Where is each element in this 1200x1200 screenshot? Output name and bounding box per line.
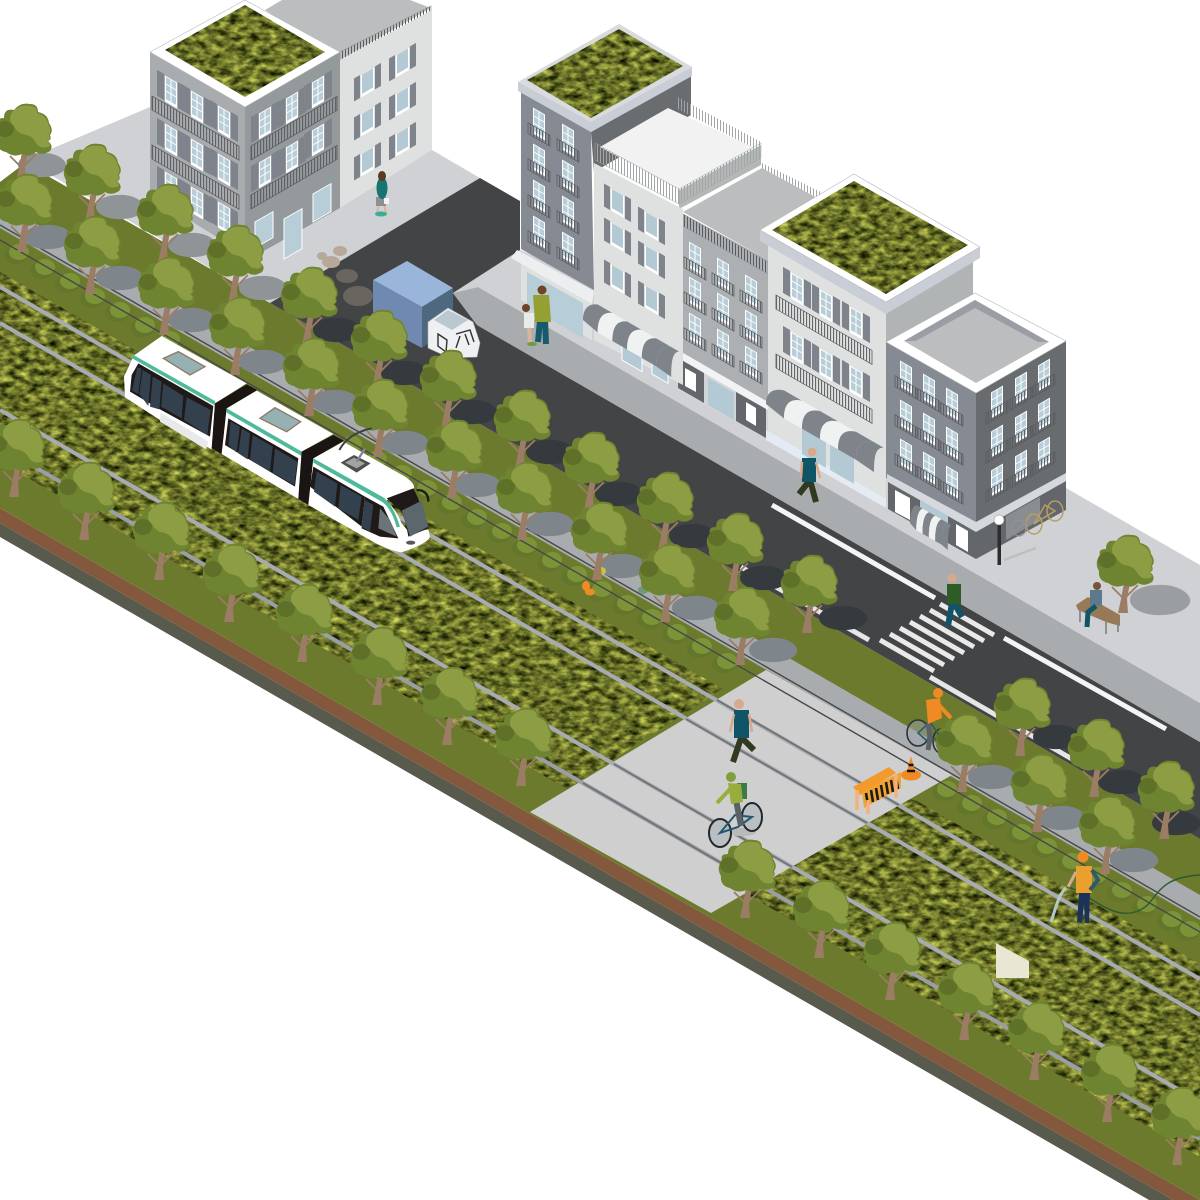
pedestrian on crossing slab	[730, 699, 754, 762]
darker sidewalk band	[453, 287, 1200, 742]
man torso	[533, 295, 551, 322]
orange cyclist	[907, 688, 951, 753]
mirror	[417, 490, 428, 502]
shoes	[375, 212, 387, 216]
building 2: light rear block	[265, 0, 432, 208]
car 1 skirt	[160, 413, 208, 449]
shop glass	[708, 378, 734, 420]
woman walking on plaza	[375, 171, 389, 216]
panel window left	[685, 368, 696, 392]
windows	[354, 43, 416, 181]
ground storey left	[888, 482, 976, 559]
globe	[994, 515, 1004, 525]
bag	[384, 198, 389, 204]
hair	[378, 171, 386, 181]
bicycle	[907, 720, 949, 753]
cone base	[901, 770, 921, 780]
left wall	[768, 240, 886, 505]
dark panel right	[736, 392, 766, 438]
pantograph base	[341, 455, 371, 473]
panel window right	[746, 402, 756, 426]
striped awning	[583, 296, 679, 381]
car 3 window band	[310, 467, 365, 527]
car 3 panes	[314, 472, 373, 532]
white roof top	[518, 24, 692, 122]
shirt	[734, 710, 749, 738]
overhead wires	[0, 225, 1200, 932]
right wall windows	[251, 70, 332, 193]
white roof frame	[886, 293, 1066, 393]
shirt	[947, 584, 961, 604]
car 2 skylight	[260, 408, 301, 432]
windscreen frame	[387, 488, 428, 537]
tree shadows: lane row	[24, 225, 1158, 872]
shadow	[728, 828, 756, 836]
roof terrace	[600, 108, 755, 190]
parked bicycles	[1012, 501, 1063, 536]
roof parapet	[518, 24, 692, 132]
shop glass	[622, 340, 668, 383]
torso	[1090, 590, 1102, 606]
water spray	[1051, 888, 1066, 922]
legs	[948, 603, 962, 626]
cone stripes	[907, 765, 915, 771]
car 3 front side pane	[378, 508, 397, 537]
inset roof	[904, 300, 1049, 383]
right windows	[986, 356, 1055, 502]
head	[1093, 582, 1101, 590]
car 2 side	[222, 408, 302, 499]
body	[926, 698, 942, 724]
upper lane line	[772, 505, 1166, 729]
worker watering	[1051, 852, 1098, 923]
side wall	[679, 145, 761, 209]
legs	[736, 800, 741, 826]
head	[734, 699, 744, 709]
left railing	[595, 143, 679, 204]
panel	[862, 772, 901, 808]
tree shadows on asphalt	[313, 318, 1200, 835]
car 3 teal band	[313, 458, 400, 527]
building 1: green roof corner block	[150, 0, 340, 259]
rear railing	[676, 96, 761, 152]
ground storey right	[976, 481, 1066, 559]
panel window right	[956, 524, 968, 552]
arm	[938, 704, 951, 718]
man legs	[538, 320, 546, 344]
legs	[1087, 606, 1096, 627]
car 1 window band	[130, 363, 213, 437]
arm	[1068, 872, 1076, 887]
light wall	[340, 10, 432, 208]
bench	[1076, 597, 1120, 626]
vest	[1076, 866, 1092, 893]
white roof frame	[760, 174, 980, 302]
lower lane line	[741, 567, 1072, 759]
planted grass track bed	[0, 270, 1200, 1160]
tram	[124, 336, 430, 552]
top	[376, 177, 388, 199]
tram rails	[0, 287, 1200, 1139]
blue-white base strip	[766, 430, 886, 508]
legs	[377, 204, 386, 213]
top bar	[853, 767, 896, 795]
plaza tree	[1097, 535, 1154, 613]
windows	[783, 267, 870, 403]
legs	[799, 480, 816, 502]
car 1 roof	[132, 336, 247, 403]
panel window left	[895, 490, 910, 520]
left windows	[895, 358, 963, 504]
bushes row	[4, 244, 1200, 941]
road asphalt	[270, 178, 1200, 839]
cab body	[428, 308, 480, 358]
small dropped items	[582, 567, 648, 596]
legs	[733, 738, 754, 762]
tree shadows: road side row	[18, 153, 287, 300]
child shoes	[527, 342, 537, 346]
windscreen glass	[402, 501, 428, 537]
trousers	[1077, 893, 1090, 923]
stains near truck	[317, 246, 373, 306]
balconies	[776, 295, 872, 423]
white cornice	[511, 250, 594, 304]
man on crossing	[947, 574, 962, 626]
box end	[422, 288, 453, 348]
helmet	[726, 772, 736, 782]
cone body	[906, 756, 916, 775]
road works barrier	[853, 767, 901, 814]
head	[948, 574, 956, 582]
rear railing	[762, 163, 821, 200]
bench with seated man	[1076, 582, 1120, 634]
wall	[594, 163, 683, 385]
left wall	[521, 92, 594, 290]
small awning	[910, 501, 951, 552]
ground storey	[678, 352, 768, 440]
front railing	[683, 214, 768, 274]
car 2 window band	[225, 418, 298, 487]
lamp shadow	[1004, 548, 1036, 560]
garage door	[1006, 497, 1040, 540]
pedestrian crossing	[880, 604, 994, 671]
post	[998, 525, 1001, 565]
cyclist on crossing slab	[709, 772, 762, 847]
arm	[801, 462, 820, 478]
helmet	[933, 688, 943, 698]
headlight	[406, 541, 415, 545]
shop windows	[255, 184, 331, 259]
man and child	[522, 286, 551, 346]
parapet	[760, 230, 980, 314]
car 1	[124, 336, 247, 449]
bicycle	[709, 803, 762, 847]
trees: road side row	[0, 104, 1195, 839]
roof	[265, 0, 431, 60]
child head	[522, 304, 530, 312]
legs	[857, 775, 896, 814]
ground storey	[521, 262, 592, 340]
car 3 front side dark	[362, 497, 398, 538]
base cornice	[887, 473, 1066, 532]
delivery truck	[373, 261, 480, 358]
white roof frame	[150, 0, 340, 107]
rail 3	[0, 410, 1200, 1102]
box side	[373, 280, 422, 348]
gangway 1	[212, 384, 257, 454]
pedestrian crossing slab over tracks	[530, 670, 952, 913]
right plaza pavement	[453, 250, 1200, 703]
building 5: mid grey block	[678, 163, 830, 440]
car 2 panes	[228, 422, 297, 485]
man walking on sidewalk	[799, 448, 820, 502]
pantograph bow	[339, 428, 372, 450]
trees: track side row	[0, 174, 1136, 874]
railing	[340, 6, 431, 67]
cab windscreen marks	[438, 330, 474, 352]
hard hat	[1078, 852, 1088, 862]
cab roof	[434, 310, 468, 330]
arms	[730, 714, 752, 732]
shirt	[802, 458, 816, 482]
plaza tree shadow	[1130, 585, 1190, 615]
roof	[683, 168, 830, 260]
car 1 skylight	[163, 352, 205, 375]
shop glass	[527, 272, 583, 338]
car 3 body	[308, 458, 430, 552]
right railing	[679, 143, 761, 204]
pantograph arm	[357, 448, 365, 462]
green roof planting	[772, 181, 968, 294]
windows	[604, 183, 665, 319]
building 4: light block with white roof terrace	[583, 96, 761, 385]
hazard stripes	[866, 777, 898, 805]
road works cone	[901, 756, 921, 780]
roof inner shade	[904, 300, 1049, 342]
ground slab: dark base edge	[0, 523, 1173, 1200]
car 2 roof	[227, 391, 333, 452]
child body	[524, 313, 534, 328]
white cornice	[678, 350, 768, 410]
bench legs	[1080, 610, 1118, 634]
car 3	[308, 428, 430, 552]
left wall	[150, 52, 245, 255]
right wall balconies	[251, 96, 337, 209]
car 3 roof	[313, 442, 414, 502]
dark panel left	[678, 358, 704, 403]
box roof	[373, 261, 453, 307]
rail 2	[0, 323, 1200, 1015]
right wall	[245, 52, 340, 255]
grey tram-side lane	[0, 203, 1200, 920]
garden hose	[1067, 875, 1200, 913]
building 6: large block with green roof	[760, 174, 980, 508]
rail grooves on crossing slab	[583, 700, 899, 885]
green roof planting	[165, 5, 325, 97]
car 2	[222, 391, 333, 499]
skirt	[376, 197, 386, 206]
car 1 side	[124, 357, 215, 449]
building 3: tall grey tower with green roof	[511, 24, 692, 340]
left wall balconies	[152, 96, 239, 209]
grey bicycle	[1012, 519, 1030, 536]
trees: front row	[0, 419, 1200, 1165]
shop glass	[802, 424, 854, 484]
road markings	[741, 505, 1166, 759]
ground slab: brown soil edge	[0, 508, 1200, 1200]
right wall	[591, 75, 691, 172]
head	[808, 448, 816, 456]
striped awning	[766, 380, 884, 478]
car 1 panes	[132, 367, 211, 435]
left plaza pavement	[25, 107, 480, 303]
building 7: grey corner block	[886, 293, 1066, 559]
street lamp	[994, 515, 1004, 565]
legs	[928, 722, 930, 750]
rail 4	[0, 447, 1200, 1139]
shop glass	[920, 500, 948, 540]
windows with balconies	[528, 105, 579, 270]
wall	[680, 212, 768, 405]
arm	[717, 788, 731, 803]
backpack	[737, 783, 747, 799]
rail 1	[0, 287, 1200, 979]
gangway 2	[298, 435, 344, 505]
jacket	[728, 783, 743, 804]
pantograph plate	[345, 458, 365, 468]
right wall	[886, 260, 973, 345]
green roof planting	[527, 29, 683, 118]
left wall windows	[157, 70, 238, 239]
car 2 teal band	[227, 408, 302, 456]
man head	[538, 286, 546, 294]
right wall	[976, 341, 1066, 530]
left wall	[886, 342, 976, 528]
windows with balconies	[684, 239, 762, 384]
survey marker plate	[996, 943, 1029, 978]
child legs	[529, 328, 530, 342]
car 1 teal band	[132, 354, 215, 405]
gold bicycle	[1026, 501, 1063, 534]
shoulders	[1090, 870, 1098, 890]
